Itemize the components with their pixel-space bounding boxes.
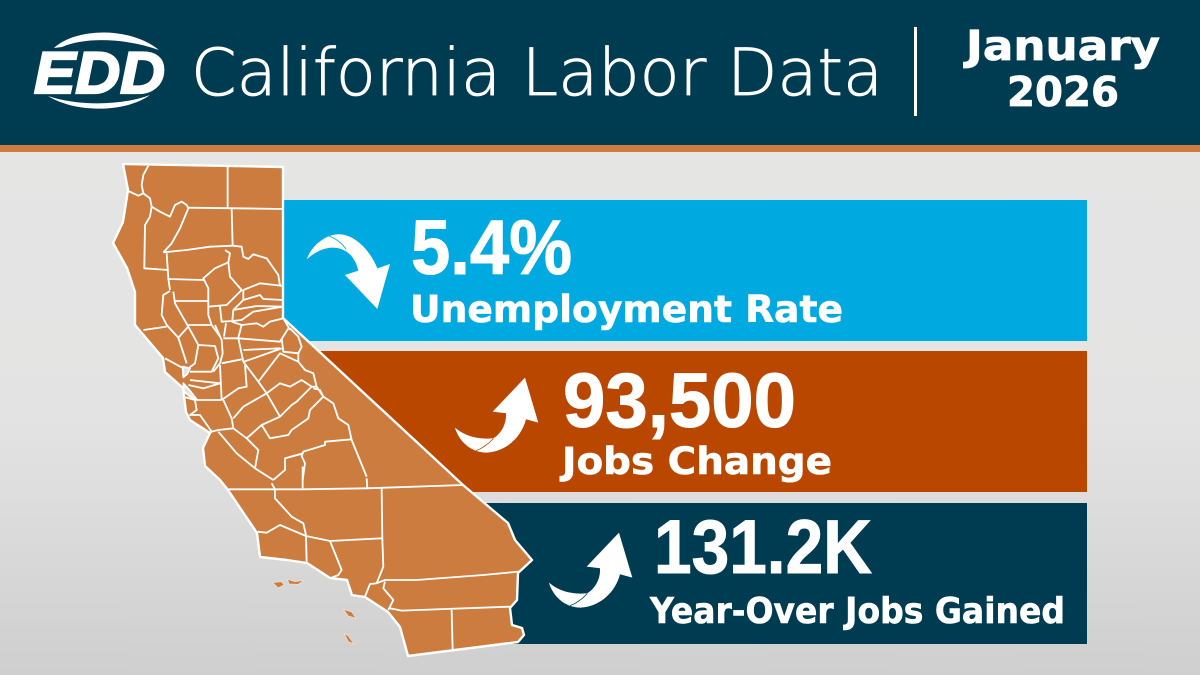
label: Unemployment Rate: Unemployment Rate <box>410 288 843 331</box>
county lines north <box>128 166 290 338</box>
stat: 93,500: 93,500 <box>563 358 796 444</box>
header banner <box>0 0 1200 152</box>
divider <box>914 27 917 116</box>
map: California counties <box>113 164 532 656</box>
county lines central <box>165 325 367 480</box>
date: 2026 <box>1007 68 1119 116</box>
label: Year-Over Jobs Gained: Year-Over Jobs Gained <box>649 591 1065 632</box>
icon: up arrow <box>455 378 538 453</box>
county lines south <box>228 467 518 650</box>
panel: unemployment rate <box>270 200 1087 341</box>
date <box>963 22 1160 116</box>
icon: down arrow <box>307 234 390 309</box>
stat: 131.2K: 131.2K <box>654 505 872 590</box>
channel islands <box>273 579 356 644</box>
date: January <box>963 22 1160 70</box>
stat: 5.4%: 5.4% <box>411 205 572 291</box>
icon: up arrow <box>549 533 632 608</box>
title: California Labor Data <box>191 36 883 111</box>
panel: year-over jobs gained <box>480 503 1087 644</box>
panel: jobs change <box>300 351 1087 492</box>
label: Jobs Change: Jobs Change <box>559 440 832 483</box>
EDD logo: EDD <box>34 41 165 106</box>
